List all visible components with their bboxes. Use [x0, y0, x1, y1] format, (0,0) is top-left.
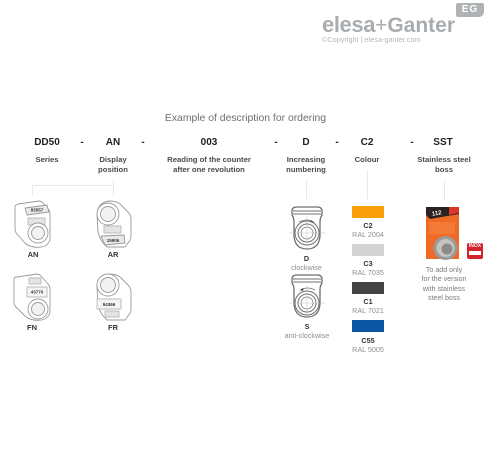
logo: elesa+Ganter — [322, 3, 484, 44]
code: C2: C2 — [361, 137, 373, 148]
badge: INOX — [467, 243, 483, 259]
code: SST: SST — [433, 137, 453, 148]
note: stainless version: for the version — [422, 275, 466, 283]
label: D clockwise: D — [304, 254, 309, 263]
label: AR: AR — [108, 250, 118, 259]
swatch: C1 dark grey — [352, 282, 384, 294]
copyright line: ©Copyright | elesa-ganter.com — [322, 35, 421, 44]
label: FN: FN — [27, 323, 37, 332]
label: C1 RAL 7021: C1 — [363, 297, 373, 306]
swatch: C55 blue — [352, 320, 384, 332]
label: C3 RAL 7035: C3 — [363, 259, 373, 268]
code: DD50: DD50 — [34, 137, 60, 148]
label: colour: Colour — [355, 155, 379, 164]
label: series: Series — [35, 155, 59, 164]
code: 003: 003 — [201, 137, 217, 148]
badge: INOX: INOX — [469, 243, 481, 249]
label: stainless steel boss: boss — [435, 165, 453, 174]
label: reading: after one revolution — [173, 165, 245, 174]
label: C3 RAL 7035: RAL 7035 — [352, 268, 384, 277]
label: C55 RAL 5005 — [352, 336, 384, 354]
label: D clockwise — [291, 254, 322, 272]
separator: - — [80, 137, 84, 148]
separator: - — [274, 137, 278, 148]
label: C1 RAL 7021 — [352, 297, 384, 315]
label: D clockwise: clockwise — [291, 263, 322, 272]
photo: orange counter with stainless boss: 112 — [432, 210, 443, 218]
note: stainless version: To add only — [426, 266, 462, 274]
swatch: C3 light grey — [352, 244, 384, 256]
label: C55 RAL 5005: RAL 5005 — [352, 345, 384, 354]
brand wordmark: elesa+Ganter — [322, 12, 455, 37]
label: FR: FR — [108, 323, 118, 332]
label: stainless steel boss: Stainless steel — [417, 155, 471, 164]
label: C1 RAL 7021: RAL 7021 — [352, 306, 384, 315]
note: stainless version: steel boss — [428, 294, 460, 302]
label: C2 RAL 2004 — [352, 221, 384, 239]
note: stainless version — [422, 266, 466, 302]
label: C3 RAL 7035 — [352, 259, 384, 277]
logo badge: EG — [456, 3, 484, 17]
label: C2 RAL 2004: C2 — [363, 221, 373, 230]
icon: counter AR: 15906 — [107, 238, 120, 243]
label: reading — [167, 155, 251, 174]
label: increasing numbering — [286, 155, 326, 174]
label: increasing numbering: numbering — [286, 165, 326, 174]
label: reading: Reading of the counter — [167, 155, 251, 164]
heading: example of description: Example of description for ordering — [165, 113, 326, 124]
icon: counter FN: 43770 — [31, 290, 44, 294]
icon: counter FR: 94366 — [103, 302, 116, 307]
separator: - — [410, 137, 414, 148]
code: D: D — [302, 137, 310, 148]
label: stainless steel boss — [417, 155, 471, 174]
label: C2 RAL 2004: RAL 2004 — [352, 230, 384, 239]
separator: - — [141, 137, 145, 148]
code: AN: AN — [106, 137, 120, 148]
separator: - — [335, 137, 339, 148]
swatch: C2 orange — [352, 206, 384, 218]
logo badge: EG: EG — [462, 4, 478, 15]
label: increasing numbering: Increasing — [287, 155, 325, 164]
note: stainless version: with stainless — [423, 285, 465, 293]
label: display position: position — [98, 165, 128, 174]
label: display position — [98, 155, 128, 174]
label: AN: AN — [28, 250, 38, 259]
label: display position: Display — [99, 155, 127, 164]
label: S anti-clockwise: anti-clockwise — [285, 331, 329, 340]
label: S anti-clockwise — [284, 322, 329, 340]
icon: counter AN: 83557 — [31, 208, 44, 212]
label: S anti-clockwise: S — [305, 322, 309, 331]
label: C55 RAL 5005: C55 — [361, 336, 375, 345]
